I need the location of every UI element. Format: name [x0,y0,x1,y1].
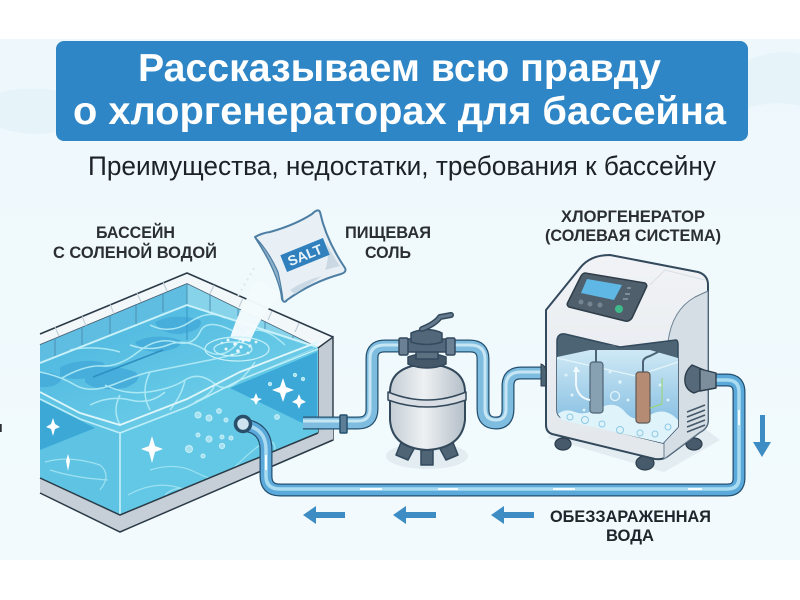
left connector [541,364,546,386]
generator side panel [664,291,708,459]
sand filter [386,315,468,469]
pipe: filter to generator [450,345,542,423]
pipe: pool to filter [303,345,400,433]
arrow: left 1 [303,506,345,524]
right connector [685,365,704,393]
label: pool: С СОЛЕНОЙ ВОДОЙ [53,243,217,262]
generator body [546,255,708,459]
salt bag [255,210,346,302]
electrodes [573,342,665,423]
label: chlorine generator: (СОЛЕВАЯ СИСТЕМА) [545,226,721,245]
tank window [557,334,678,443]
filter tank [390,366,465,450]
water bubbles [564,370,670,414]
label: pool [53,223,217,262]
right wall strip [318,337,333,446]
chlorine generator [541,255,720,472]
surface edges [40,305,317,363]
pool deck [40,273,333,348]
filter shadow [386,443,468,469]
label: food salt: СОЛЬ [365,243,411,262]
salt deposit [558,405,678,443]
label: food salt [345,223,431,262]
label: chlorine generator: ХЛОРГЕНЕРАТОР [561,207,705,226]
title banner [56,41,748,141]
filter legs [396,440,416,460]
pipe inlet ring [236,416,250,432]
generator shadow [548,420,720,472]
back wall [40,284,318,363]
label: disinfected water: ВОДА [606,526,654,545]
floor edge line [93,350,163,377]
generator feet [555,438,702,470]
left water face [40,392,120,515]
title banner: о хлоргенераторах для бассейна [73,90,726,133]
surface caustics [40,314,285,425]
title banner: Рассказываем всю правду [138,47,661,90]
salt stream [205,268,282,361]
subtitle: Преимущества, недостатки, требования к бассейну [88,151,716,181]
arrow: left 3 [491,506,534,524]
label: chlorine generator [545,207,721,245]
pipe: return line from generator to pool [244,380,739,490]
label: food salt: ПИЩЕВАЯ [345,223,431,242]
control panel [567,273,647,321]
bubbles [186,373,305,458]
label: disinfected water [550,507,711,545]
arrow: left 2 [393,506,436,524]
arrow: down [753,415,771,457]
salt label: SALT [285,241,325,269]
dark reflection cells [40,316,201,389]
label: pool: БАССЕЙН [96,223,175,242]
filter valve [408,354,446,368]
pool [40,273,333,532]
right water face [120,347,318,515]
vents [687,405,705,432]
pipe flow marks [266,410,739,489]
pool base [40,428,333,532]
water surface [40,305,317,433]
label: disinfected water: ОБЕЗЗАРАЖЕННАЯ [550,507,711,526]
sparkles [46,378,306,471]
underwater caustics [45,441,275,495]
